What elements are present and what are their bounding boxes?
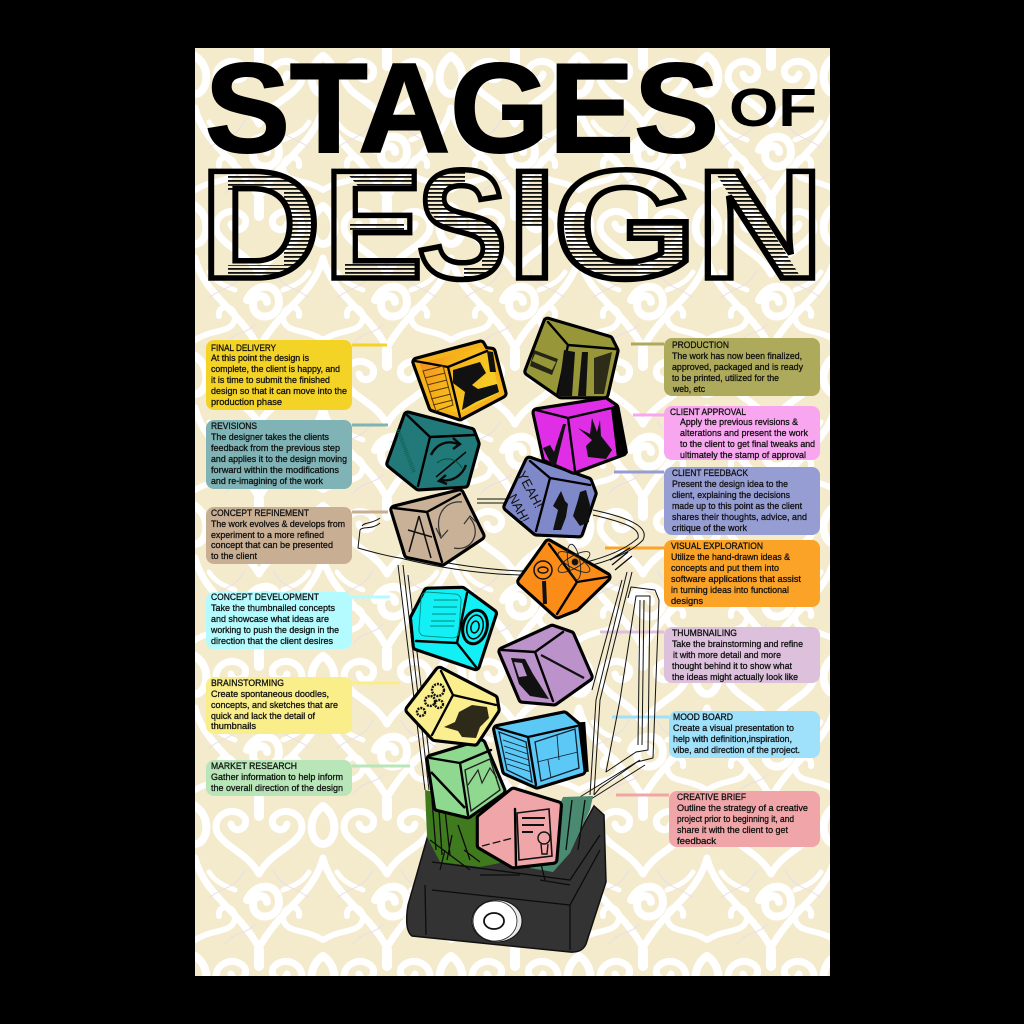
title: DESIGN: E	[324, 138, 423, 311]
body text: working to push the design in the	[210, 625, 339, 636]
cube: visual exploration	[522, 543, 608, 614]
body text	[211, 519, 345, 562]
panel: revisions	[206, 420, 352, 489]
icon: cycle arrows	[436, 502, 476, 549]
body text: Outline the strategy of a creative	[677, 803, 808, 814]
jar contents green	[425, 790, 500, 867]
cube: market research	[430, 744, 501, 815]
body text: feedback from the previous step	[211, 443, 340, 454]
body text	[672, 639, 803, 683]
icon: head with brain	[444, 705, 489, 738]
icon: check mark	[543, 424, 566, 466]
cube: mood board	[497, 716, 589, 785]
body text: design so that it can move into the	[211, 386, 347, 397]
body text: complete, the client is happy, and	[211, 364, 340, 375]
heading: THUMBNAILING	[672, 628, 737, 639]
icon: printed photo	[530, 350, 612, 396]
cube: creative brief	[481, 792, 558, 865]
icon: target	[459, 608, 491, 646]
panel: final delivery	[206, 340, 352, 410]
body text: The work has now been finalized,	[672, 351, 802, 362]
body text: At this point the design is	[211, 353, 309, 364]
panel: brainstorming	[206, 677, 352, 734]
icon: stacked papers	[423, 366, 453, 411]
title: DESIGN: N	[696, 138, 824, 311]
title: DESIGN: I	[507, 138, 557, 311]
cube: concept development	[414, 591, 493, 667]
blender jar outline	[358, 499, 659, 806]
base detail lines	[425, 795, 600, 950]
body text: concept that can be presented	[211, 540, 333, 551]
body text: and applies it to the design moving	[211, 454, 347, 465]
body text: thumbnails	[211, 721, 256, 732]
body text: to be printed, utilized for the	[672, 373, 779, 384]
body text: to the client to get final tweaks and	[680, 439, 815, 450]
panel: market research	[206, 760, 352, 796]
body text: it is time to submit the finished	[211, 375, 330, 386]
panel: creative brief	[669, 791, 820, 847]
body text: the overall direction of the design	[211, 783, 343, 794]
icon: mood board panels	[499, 729, 579, 782]
panel: visual exploration	[664, 540, 820, 607]
icon: yeah nah lettering	[505, 468, 546, 525]
icon: yeah nah lettering: NAH!	[505, 491, 533, 525]
body text: Apply the previous revisions &	[680, 417, 799, 428]
panel: concept development	[206, 592, 352, 649]
icon: yeah nah lettering: YEAH!	[514, 468, 546, 511]
body text: designs	[671, 596, 703, 607]
title: DESIGN: S	[417, 138, 507, 311]
body text	[680, 417, 815, 461]
icon: gears	[417, 684, 444, 716]
body text: concepts, and sketches that are	[211, 700, 338, 711]
cube: revisions	[391, 415, 475, 486]
heading: CLIENT FEEDBACK	[672, 468, 749, 479]
body text: forward within the modifications	[211, 465, 339, 476]
body text: in turning ideas into functional	[671, 585, 789, 596]
title: STAGES OF: STAGES	[205, 37, 719, 179]
body text: Gather information to help inform	[211, 772, 343, 783]
heading: CLIENT APPROVAL	[670, 407, 747, 418]
body text: to the client	[211, 551, 257, 562]
cube: brainstorming	[410, 671, 496, 741]
body text	[671, 552, 801, 607]
body text: ultimately the stamp of approval	[680, 450, 806, 461]
body text: web, etc	[672, 384, 705, 395]
cube: production	[529, 322, 616, 396]
panel: mood board	[669, 711, 820, 758]
heading: BRAINSTORMING	[211, 678, 284, 689]
body text: software applications that assist	[671, 574, 801, 585]
panel: production	[664, 338, 820, 396]
icon: checklist	[419, 592, 461, 638]
panel: client feedback	[664, 467, 820, 535]
body text: Create a visual presentation to	[673, 723, 794, 734]
body text: critique of the work	[672, 523, 747, 534]
icon: chart	[431, 759, 500, 811]
body text: experiment to a more refined	[211, 530, 324, 541]
body text: shares their thoughts, advice, and	[672, 512, 807, 523]
title: STAGES OF: OF	[729, 78, 817, 138]
title: DESIGN	[200, 138, 824, 311]
body text: Take the brainstorming and refine	[672, 639, 803, 650]
body text: thought behind it to show what	[672, 661, 792, 672]
panel: thumbnailing	[664, 627, 820, 683]
body text: it with more detail and more	[673, 650, 781, 661]
heading: VISUAL EXPLORATION	[671, 541, 763, 552]
body text	[673, 723, 800, 756]
icon: sketch figure	[511, 658, 549, 699]
body text: vibe, and direction of the project.	[673, 745, 800, 756]
icon: thumbs up and down	[553, 490, 590, 530]
heading: CREATIVE BRIEF	[677, 792, 746, 803]
body text	[211, 772, 343, 794]
body text: The work evolves & develops from	[211, 519, 345, 530]
cube: client feedback	[505, 461, 592, 533]
panel: concept refinement	[206, 507, 352, 564]
body text: project prior to beginning it, and	[677, 814, 794, 825]
title: DESIGN: G	[553, 138, 697, 311]
body text: Present the design idea to the	[672, 479, 788, 490]
body text	[672, 351, 803, 395]
body text: approved, packaged and is ready	[672, 362, 803, 373]
body text: help with definition,inspiration,	[673, 734, 792, 745]
heading: REVISIONS	[211, 421, 257, 432]
title: DESIGN: D	[200, 138, 321, 311]
heading: MARKET RESEARCH	[211, 761, 297, 772]
cube: final delivery	[415, 345, 502, 417]
cube: concept refinement	[394, 494, 480, 562]
poster background	[195, 48, 830, 976]
body text: alterations and present the work	[680, 428, 808, 439]
body text: made up to this point as the client	[672, 501, 802, 512]
blender illustration	[358, 499, 659, 952]
body text: quick and lack the detail of	[211, 711, 315, 722]
body text	[210, 603, 339, 647]
heading: FINAL DELIVERY	[211, 343, 277, 354]
cube: thumbnailing	[502, 629, 588, 701]
icon: magnifying eye	[534, 561, 552, 604]
icon: recycle arrows and protractor	[431, 438, 466, 484]
body text	[211, 432, 347, 487]
jar contents teal	[530, 796, 593, 872]
body text: the ideas might actually look like	[672, 672, 798, 683]
heading: CONCEPT REFINEMENT	[211, 508, 309, 519]
body text	[672, 479, 807, 534]
icon: delivery photo	[453, 362, 499, 410]
icon: compass	[408, 516, 432, 558]
icon: ok hand	[578, 418, 612, 459]
blender base	[407, 806, 606, 952]
body text: share it with the client to get	[677, 825, 788, 836]
icon: atom	[555, 543, 593, 581]
body text: production phase	[211, 397, 282, 408]
heading: PRODUCTION	[672, 340, 729, 351]
body text	[677, 803, 808, 847]
body text: The designer takes the clients	[211, 432, 329, 443]
cube: client approval	[536, 402, 628, 471]
body text	[211, 353, 347, 408]
connector lines	[352, 344, 669, 795]
heading: CONCEPT DEVELOPMENT	[211, 592, 319, 603]
icon: document and lightbulb	[482, 809, 552, 860]
heading: MOOD BOARD	[673, 712, 733, 723]
body text: and re-imagining of the work	[211, 476, 323, 487]
body text: Take the thumbnailed concepts	[211, 603, 335, 614]
body text: client, explaining the decisions	[672, 490, 790, 501]
body text: Create spontaneous doodles,	[211, 689, 329, 700]
body text: Utilize the hand-drawn ideas &	[671, 552, 791, 563]
body text	[211, 689, 338, 732]
body text: direction that the client desires	[211, 636, 333, 647]
body text: and showcase what ideas are	[211, 614, 329, 625]
body text: concepts and put them into	[671, 563, 779, 574]
panel: client approval	[664, 406, 820, 461]
body text: feedback	[677, 836, 716, 847]
power dial	[472, 900, 522, 942]
